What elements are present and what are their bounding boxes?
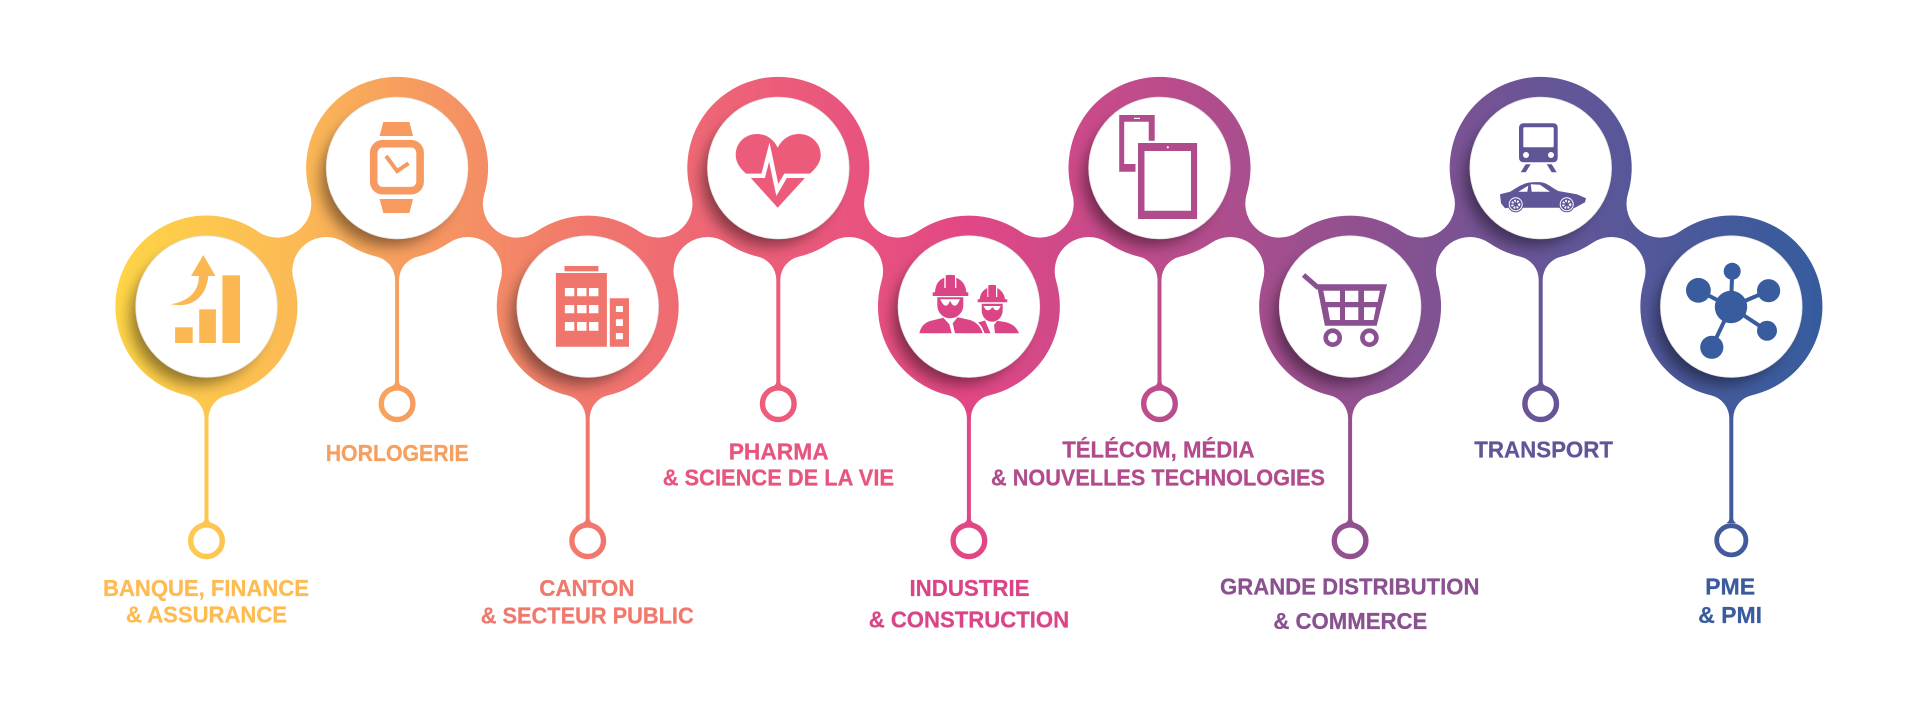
label: pme — [1698, 574, 1762, 628]
end rings — [191, 388, 1746, 556]
icon: heart with pulse — [736, 134, 821, 208]
icon: watch — [374, 122, 420, 213]
icon: phone and tablet — [1119, 115, 1197, 219]
label: telecom — [991, 436, 1325, 491]
icon: buildings — [556, 266, 629, 347]
icon: shopping cart — [1304, 275, 1387, 345]
label: pme: PME — [1705, 574, 1755, 600]
label: telecom: TÉLÉCOM, MÉDIA — [1062, 436, 1254, 463]
label: grande distribution: GRANDE DISTRIBUTION — [1220, 574, 1480, 600]
label: canton — [481, 575, 694, 629]
label: banque: BANQUE, FINANCE — [103, 575, 309, 601]
label: telecom: & NOUVELLES TECHNOLOGIES — [991, 465, 1325, 491]
label: industrie: INDUSTRIE — [910, 575, 1030, 601]
circle drop shadows — [130, 112, 1789, 385]
label: industrie — [869, 575, 1069, 633]
label: canton: & SECTEUR PUBLIC — [481, 603, 694, 629]
white icon discs — [136, 97, 1802, 377]
label: canton: CANTON — [539, 575, 634, 601]
label: pme: & PMI — [1698, 602, 1762, 628]
label: pharma: PHARMA — [729, 439, 829, 465]
icon: network nodes — [1686, 263, 1780, 359]
icon: train and car — [1500, 123, 1586, 212]
connected ribbon with stems — [115, 77, 1822, 523]
label: banque: & ASSURANCE — [126, 601, 287, 627]
label: industrie: & CONSTRUCTION — [869, 607, 1069, 633]
label: horlogerie: HORLOGERIE — [326, 440, 469, 466]
label: pharma: & SCIENCE DE LA VIE — [663, 465, 894, 491]
icon: growth chart — [171, 255, 240, 343]
label: transport: TRANSPORT — [1474, 437, 1613, 463]
label: grande distribution — [1220, 574, 1480, 634]
label: banque — [103, 575, 309, 627]
label: pharma — [663, 439, 894, 491]
label: grande distribution: & COMMERCE — [1273, 608, 1427, 634]
icon: two construction workers — [919, 275, 1019, 333]
